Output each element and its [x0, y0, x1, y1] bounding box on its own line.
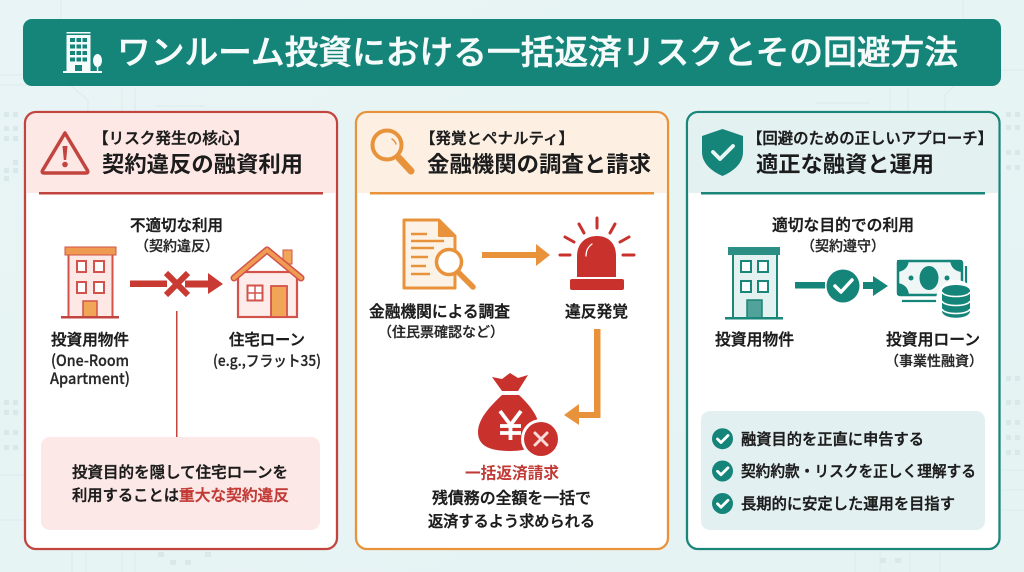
label: home loan: 住宅ローン	[229, 328, 305, 350]
callout: breach warning: 投資目的を隠して住宅ローンを	[72, 460, 288, 482]
icon: banknotes and coins	[897, 260, 976, 320]
panel: correct approach	[687, 112, 1000, 549]
panel: discovery and penalty	[356, 112, 668, 549]
label: resident record check: （住民票確認など）	[378, 322, 504, 342]
title banner	[23, 19, 1001, 86]
label: contract compliance: （契約遵守）	[801, 236, 885, 256]
label: investment loan: 投資用ローン	[886, 327, 980, 350]
title text: ワンルーム投資における一括返済リスクとその回避方法	[117, 25, 958, 74]
label: breach found: 違反発覚	[565, 299, 628, 322]
text: demand description line 2: 返済するよう求められる	[428, 510, 595, 532]
arrow: to repayment demand	[564, 329, 600, 425]
icon: yen money bag	[478, 373, 561, 459]
connector line	[176, 311, 178, 437]
label: investigation: 金融機関による調査	[369, 299, 510, 322]
panel: risk core	[25, 112, 337, 549]
arrow: to alarm	[482, 244, 550, 266]
panel heading: 契約違反の融資利用	[102, 147, 303, 179]
label: business financing: （事業性融資）	[885, 351, 983, 371]
icon: warning triangle	[42, 133, 88, 173]
icon: house	[234, 250, 301, 317]
panel label: 【リスク発生の核心】	[93, 126, 249, 148]
icon: document with magnifier	[404, 220, 473, 288]
label: investment property: 投資用物件	[51, 328, 129, 350]
callout: breach warning: 重大な契約違反	[179, 484, 289, 506]
check item 1: 融資目的を正直に申告する	[741, 428, 924, 450]
panel label: 【回避のための正しいアプローチ】	[747, 126, 993, 148]
label: improper use: 不適切な利用	[130, 214, 223, 236]
icon: magnifier	[372, 130, 411, 171]
callout: breach warning: 利用することは	[72, 484, 179, 506]
check item 3: 長期的に安定した運用を目指す	[741, 492, 955, 514]
panel heading: 金融機関の調査と請求	[427, 147, 651, 179]
arrow: approved	[795, 270, 888, 302]
icon: building with tree	[63, 32, 102, 73]
icon: teal building	[725, 247, 783, 320]
check item 2: 契約約款・リスクを正しく理解する	[741, 460, 976, 482]
label: one-room: (One-Room	[51, 349, 129, 371]
callout: breach warning	[41, 437, 320, 530]
panel heading: 適正な融資と運用	[756, 147, 934, 179]
arrow: blocked	[130, 273, 223, 295]
label: proper use: 適切な目的での利用	[772, 212, 914, 236]
panel label: 【発覚とペナルティ】	[420, 126, 574, 148]
icon: alarm light	[560, 218, 634, 290]
label: apartment: Apartment)	[50, 367, 130, 389]
label: investment property: 投資用物件	[715, 327, 794, 350]
icon: investment building	[61, 247, 119, 318]
label: contract breach: （契約違反）	[135, 236, 219, 256]
label: flat 35: (e.g.,フラット35)	[213, 350, 321, 371]
text: demand description line 1: 残債務の全額を一括で	[432, 486, 591, 508]
checklist	[701, 411, 985, 530]
icon: shield	[702, 129, 743, 176]
label: lump-sum demand: 一括返済請求	[465, 460, 559, 484]
